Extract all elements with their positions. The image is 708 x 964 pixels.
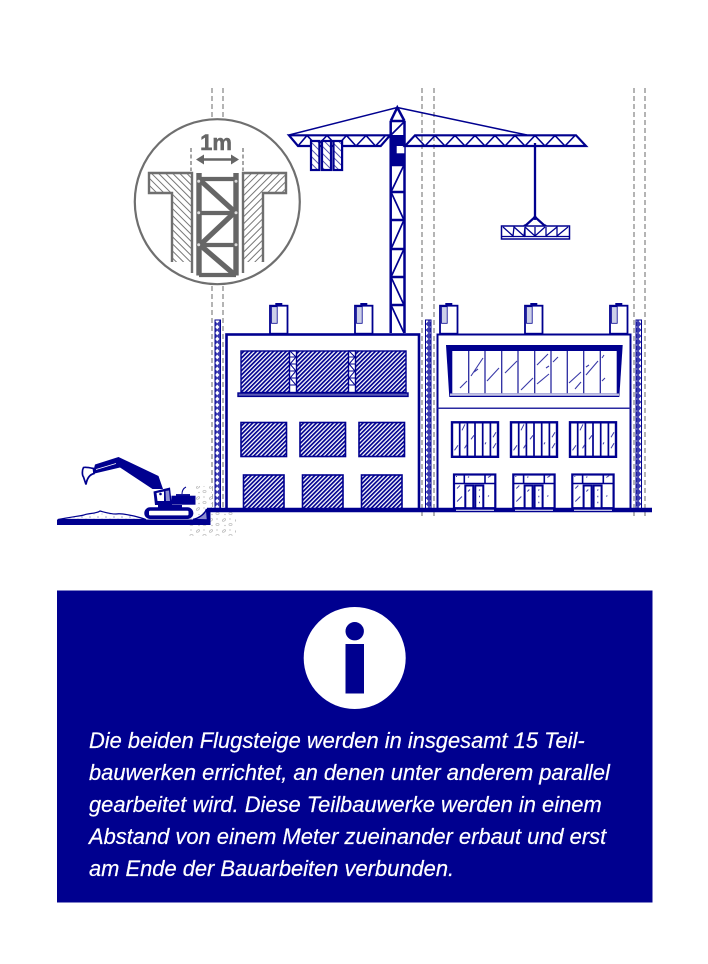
detail magnifier: 1 metre gap xyxy=(135,119,300,284)
building left xyxy=(226,303,419,510)
excavator boom xyxy=(92,457,163,489)
left wall section xyxy=(149,173,192,273)
panel text xyxy=(87,728,611,881)
scaffold columns xyxy=(215,320,642,510)
excavator body xyxy=(158,487,196,508)
hoist cable xyxy=(534,143,536,218)
suspended load xyxy=(502,216,570,239)
ground floor openings xyxy=(244,475,402,509)
excavator bucket xyxy=(82,467,94,484)
soil around foundation xyxy=(188,486,236,536)
panel text: gearbeitet wird. Diese Teilbauwerke werden in einem xyxy=(89,792,602,817)
crane slewing unit xyxy=(390,135,405,165)
excavator tracks xyxy=(144,507,193,519)
tower crane xyxy=(289,108,586,333)
right wall section xyxy=(243,173,286,273)
middle windows xyxy=(241,422,404,456)
ground line xyxy=(57,508,652,525)
crane mast xyxy=(391,108,404,333)
top glazing xyxy=(446,345,623,397)
panel text: Abstand von einem Meter zueinander erbaut und erst xyxy=(87,824,607,849)
tie cables xyxy=(289,108,527,135)
dimension marker xyxy=(191,148,243,171)
building right xyxy=(438,303,630,510)
excavator xyxy=(82,457,196,519)
panel text: am Ende der Bauarbeiten verbunden. xyxy=(89,856,454,881)
icon: information xyxy=(304,607,406,709)
top band window xyxy=(238,351,408,396)
panel text: Die beiden Flugsteige werden in insgesamt 15 Teil- xyxy=(89,728,585,753)
information panel xyxy=(57,590,652,902)
steel truss between sections xyxy=(197,173,238,276)
soil mound xyxy=(58,511,146,520)
entrance doors xyxy=(454,474,495,508)
dimension label: 1m xyxy=(200,130,232,155)
counter jib xyxy=(289,135,390,146)
counterweights xyxy=(311,141,342,170)
panel text: bauwerken errichtet, an denen unter anderem parallel xyxy=(89,760,611,785)
excavator cab xyxy=(154,488,172,505)
main jib xyxy=(405,135,586,146)
dashed expansion joint lines xyxy=(212,88,645,516)
middle windows xyxy=(452,422,498,457)
